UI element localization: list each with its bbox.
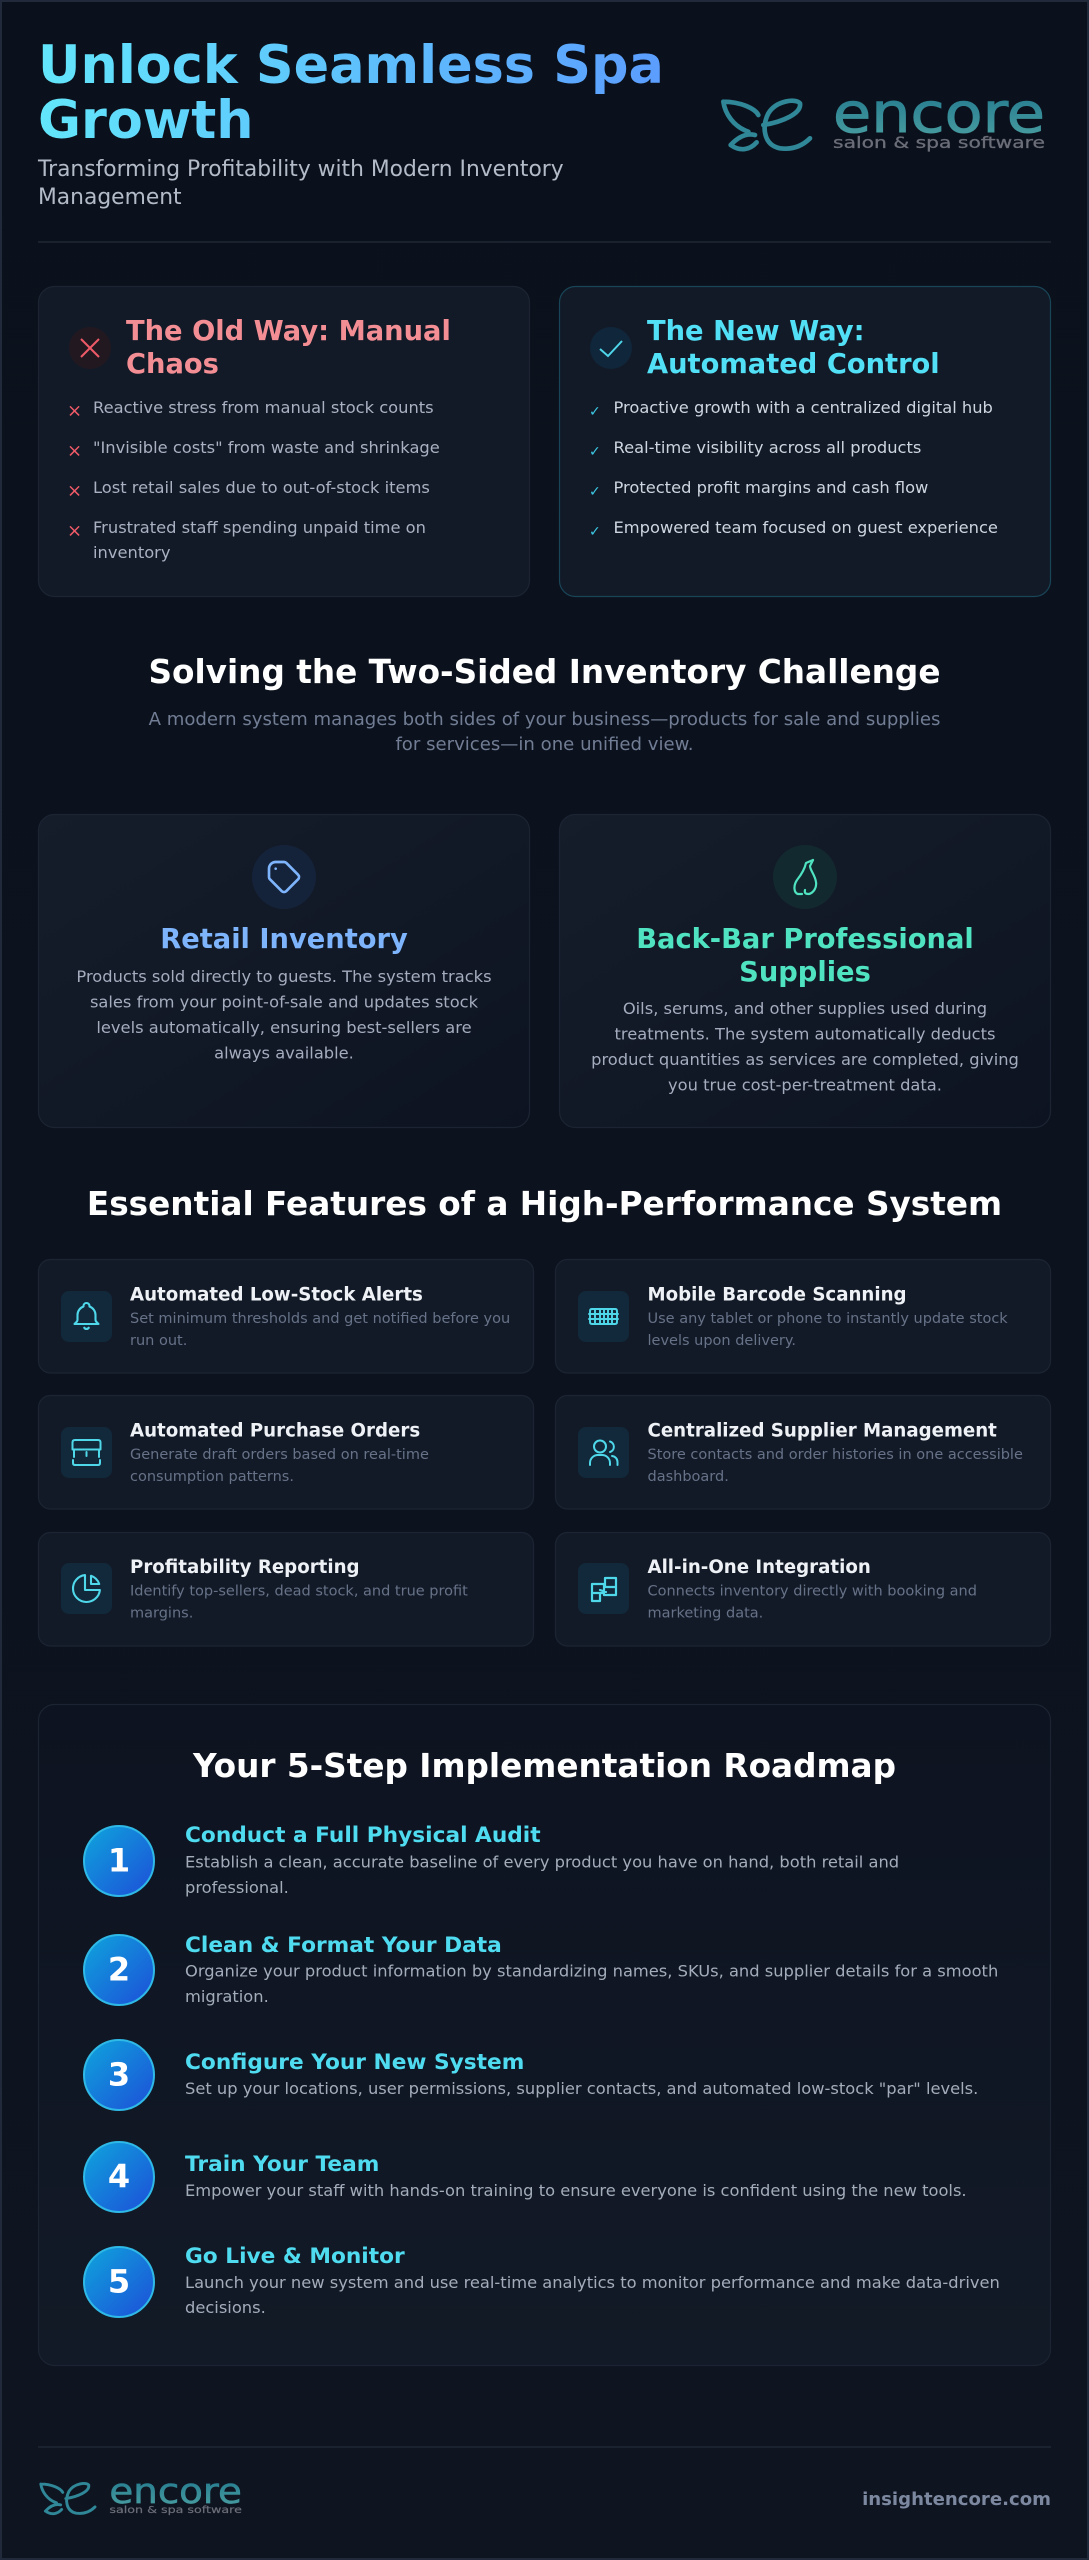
logo: encore salon and spa software: encore	[833, 81, 1045, 145]
feature: profitability reporting	[38, 1532, 534, 1646]
section heading: two-sided challenge: Solving the Two-Sided Inventory Challenge	[148, 653, 941, 691]
new way list: Real-time visibility across all products	[614, 438, 921, 457]
new way list: ✓	[589, 524, 601, 540]
step 2: Clean & Format Your Data	[185, 1933, 502, 1958]
step 5: Go Live & Monitor	[185, 2244, 405, 2269]
retail description: always available.	[214, 1044, 354, 1062]
old way list	[67, 398, 440, 562]
retail description: levels automatically, ensuring best-sellers are	[96, 1018, 472, 1037]
panel: back-bar supplies	[560, 814, 1050, 1128]
section intro text: A modern system manages both sides of your business—products for sale and supplies	[149, 709, 940, 730]
step 4: Empower your staff with hands-on training to ensure everyone is confident using the new tools.	[185, 2181, 967, 2200]
feature: mobile barcode scanning	[556, 1260, 1050, 1373]
back-bar description: Oils, serums, and other supplies used during	[623, 999, 987, 1018]
retail heading: Retail Inventory	[160, 924, 408, 955]
old way list: Frustrated staff spending unpaid time on	[93, 518, 426, 537]
step 3: Configure Your New System	[185, 2050, 524, 2075]
back-bar description: you true cost-per-treatment data.	[668, 1076, 942, 1094]
retail description: Products sold directly to guests. The system tracks	[76, 967, 492, 986]
icon: oil bottle	[773, 845, 837, 909]
footer website: insightencore.com	[862, 2489, 1051, 2510]
title: Growth	[38, 90, 254, 151]
feature: centralized supplier management	[556, 1396, 1050, 1509]
roadmap heading: Your 5-Step Implementation Roadmap	[192, 1747, 896, 1785]
icon: barcode grid	[578, 1291, 629, 1342]
feature: automated low-stock alerts: Automated Low-Stock Alerts	[130, 1284, 423, 1306]
feature: automated purchase orders: consumption patterns.	[130, 1469, 294, 1485]
new way list: Proactive growth with a centralized digital hub	[614, 398, 993, 417]
step 2	[84, 1933, 998, 2006]
icon: connected blocks	[578, 1563, 629, 1614]
step 2: migration.	[185, 1987, 269, 2006]
panel: retail inventory	[38, 814, 530, 1128]
new way list: ✓	[589, 404, 601, 420]
new way list: ✓	[589, 484, 601, 500]
step 1	[84, 1823, 899, 1897]
new way heading: Automated Control	[647, 349, 940, 380]
feature: automated low-stock alerts: Set minimum thresholds and get notified before you	[130, 1311, 510, 1327]
old way list: Lost retail sales due to out-of-stock items	[93, 478, 430, 497]
retail description: sales from your point-of-sale and updates stock	[90, 992, 479, 1012]
back-bar heading: Supplies	[739, 957, 871, 988]
old way heading: Chaos	[126, 349, 219, 380]
step 4	[84, 2142, 967, 2212]
old way list: ×	[67, 400, 82, 422]
subtitle: Management	[38, 185, 182, 210]
feature: automated low-stock alerts: run out.	[130, 1333, 187, 1349]
feature: automated purchase orders	[38, 1396, 534, 1509]
subtitle: Transforming Profitability with Modern Inventory	[37, 157, 564, 182]
old way list: ×	[67, 480, 82, 502]
feature: mobile barcode scanning: Use any tablet or phone to instantly update stock	[648, 1311, 1008, 1327]
icon: bell	[61, 1291, 112, 1342]
title: Unlock Seamless Spa	[38, 35, 664, 96]
old way list: "Invisible costs" from waste and shrinkage	[93, 438, 440, 457]
section heading: essential features: Essential Features of a High-Performance System	[87, 1185, 1002, 1223]
step 5	[84, 2244, 1000, 2317]
feature: centralized supplier management: dashboard.	[648, 1469, 729, 1485]
feature: profitability reporting: Identify top-sellers, dead stock, and true profit	[130, 1584, 468, 1600]
step 1: Establish a clean, accurate baseline of every product you have on hand, both retail and	[185, 1852, 899, 1872]
footer logo	[41, 2472, 242, 2516]
panel: the old way	[38, 286, 530, 596]
panel: implementation roadmap	[38, 1704, 1050, 2366]
new way heading: The New Way:	[647, 316, 865, 347]
feature: all-in-one integration: marketing data.	[648, 1606, 763, 1622]
step 2: Organize your product information by standardizing names, SKUs, and supplier details for a smooth	[185, 1962, 998, 1980]
section intro text: for services—in one unified view.	[395, 734, 694, 755]
new way list: ✓	[589, 444, 601, 460]
back-bar description: product quantities as services are completed, giving	[591, 1050, 1019, 1069]
logo: encore salon and spa software	[723, 81, 1045, 152]
icon: check mark	[590, 327, 632, 369]
feature: all-in-one integration: Connects inventory directly with booking and	[648, 1584, 977, 1600]
back-bar description: treatments. The system automatically deducts	[614, 1024, 996, 1044]
header	[37, 35, 1045, 210]
step 4: Train Your Team	[185, 2152, 379, 2177]
step 3: 3	[108, 2056, 130, 2094]
feature: automated purchase orders: Generate draft orders based on real-time	[130, 1447, 429, 1463]
old way list: ×	[67, 520, 82, 542]
feature: mobile barcode scanning: Mobile Barcode Scanning	[648, 1284, 907, 1306]
feature: automated purchase orders: Automated Purchase Orders	[130, 1420, 420, 1442]
feature: all-in-one integration: All-in-One Integration	[648, 1557, 871, 1578]
new way list: Empowered team focused on guest experience	[614, 518, 998, 537]
step 1: professional.	[185, 1878, 289, 1897]
step 4: 4	[108, 2158, 130, 2196]
feature: automated low-stock alerts	[38, 1260, 534, 1373]
panel: the new way	[560, 286, 1050, 596]
feature: centralized supplier management: Centralized Supplier Management	[648, 1420, 997, 1442]
old way list: ×	[67, 440, 82, 462]
logo: encore salon and spa software: salon & spa software	[833, 133, 1045, 152]
icon: users	[578, 1427, 629, 1478]
old way list: inventory	[93, 543, 171, 562]
feature: profitability reporting: margins.	[130, 1606, 193, 1622]
icon: price tag	[252, 845, 316, 909]
feature: all-in-one integration	[556, 1532, 1050, 1646]
icon: order box	[61, 1427, 112, 1478]
feature: mobile barcode scanning: levels upon delivery.	[648, 1333, 796, 1349]
step 1: Conduct a Full Physical Audit	[185, 1823, 541, 1848]
back-bar heading: Back-Bar Professional	[636, 924, 974, 955]
step 3	[84, 2040, 978, 2110]
feature: centralized supplier management: Store contacts and order histories in one accessible	[648, 1447, 1023, 1463]
step 3: Set up your locations, user permissions, supplier contacts, and automated low-stock "par" levels.	[185, 2079, 978, 2098]
step 5: 5	[108, 2262, 130, 2300]
old way heading: The Old Way: Manual	[126, 316, 451, 347]
old way list: Reactive stress from manual stock counts	[93, 398, 434, 417]
icon: red cross	[69, 327, 111, 369]
step 1: 1	[108, 1842, 130, 1880]
new way list: Protected profit margins and cash flow	[614, 478, 928, 497]
step 5: Launch your new system and use real-time analytics to monitor performance and make data-driven	[185, 2273, 1000, 2292]
new way list	[589, 398, 998, 540]
step 2: 2	[108, 1950, 130, 1988]
feature: profitability reporting: Profitability Reporting	[130, 1557, 360, 1578]
footer logo: salon & spa software	[109, 2505, 242, 2516]
footer logo: encore	[109, 2472, 242, 2512]
step 5: decisions.	[185, 2298, 266, 2317]
icon: pie chart	[61, 1563, 112, 1614]
footer	[41, 2472, 1051, 2516]
